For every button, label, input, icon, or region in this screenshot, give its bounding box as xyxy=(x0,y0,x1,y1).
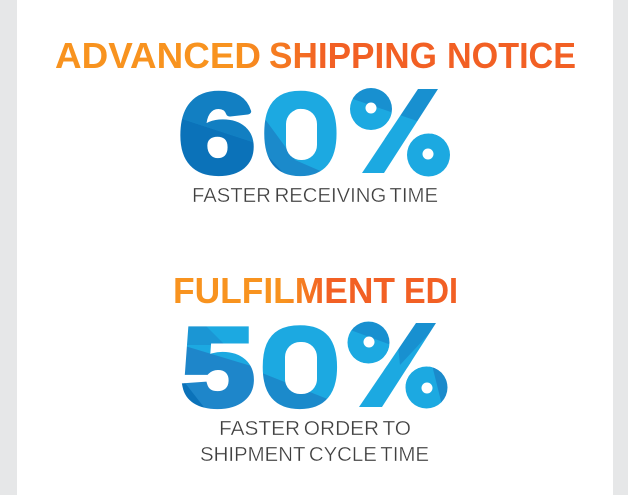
heading: advanced shipping notice: SHIPPING xyxy=(269,35,437,76)
caption: faster receiving time: FASTER RECEIVING TIME xyxy=(192,184,438,207)
background side bar: right xyxy=(613,0,628,495)
statistic: 50% xyxy=(182,322,448,410)
heading: advanced shipping notice xyxy=(55,35,576,76)
heading: advanced shipping notice: ADVANCED xyxy=(55,35,261,76)
heading: fulfilment edi: FULFILMENT xyxy=(173,270,395,311)
caption: faster order to shipment cycle time: SHIPMENT CYCLE TIME xyxy=(200,443,429,466)
heading: advanced shipping notice: NOTICE xyxy=(447,35,576,76)
caption: faster order to shipment cycle time xyxy=(200,417,429,466)
heading: fulfilment edi: EDI xyxy=(404,270,458,311)
statistic: 60% xyxy=(180,88,450,176)
background side bar: left xyxy=(0,0,17,495)
caption: faster order to shipment cycle time: FASTER ORDER TO xyxy=(219,417,411,440)
